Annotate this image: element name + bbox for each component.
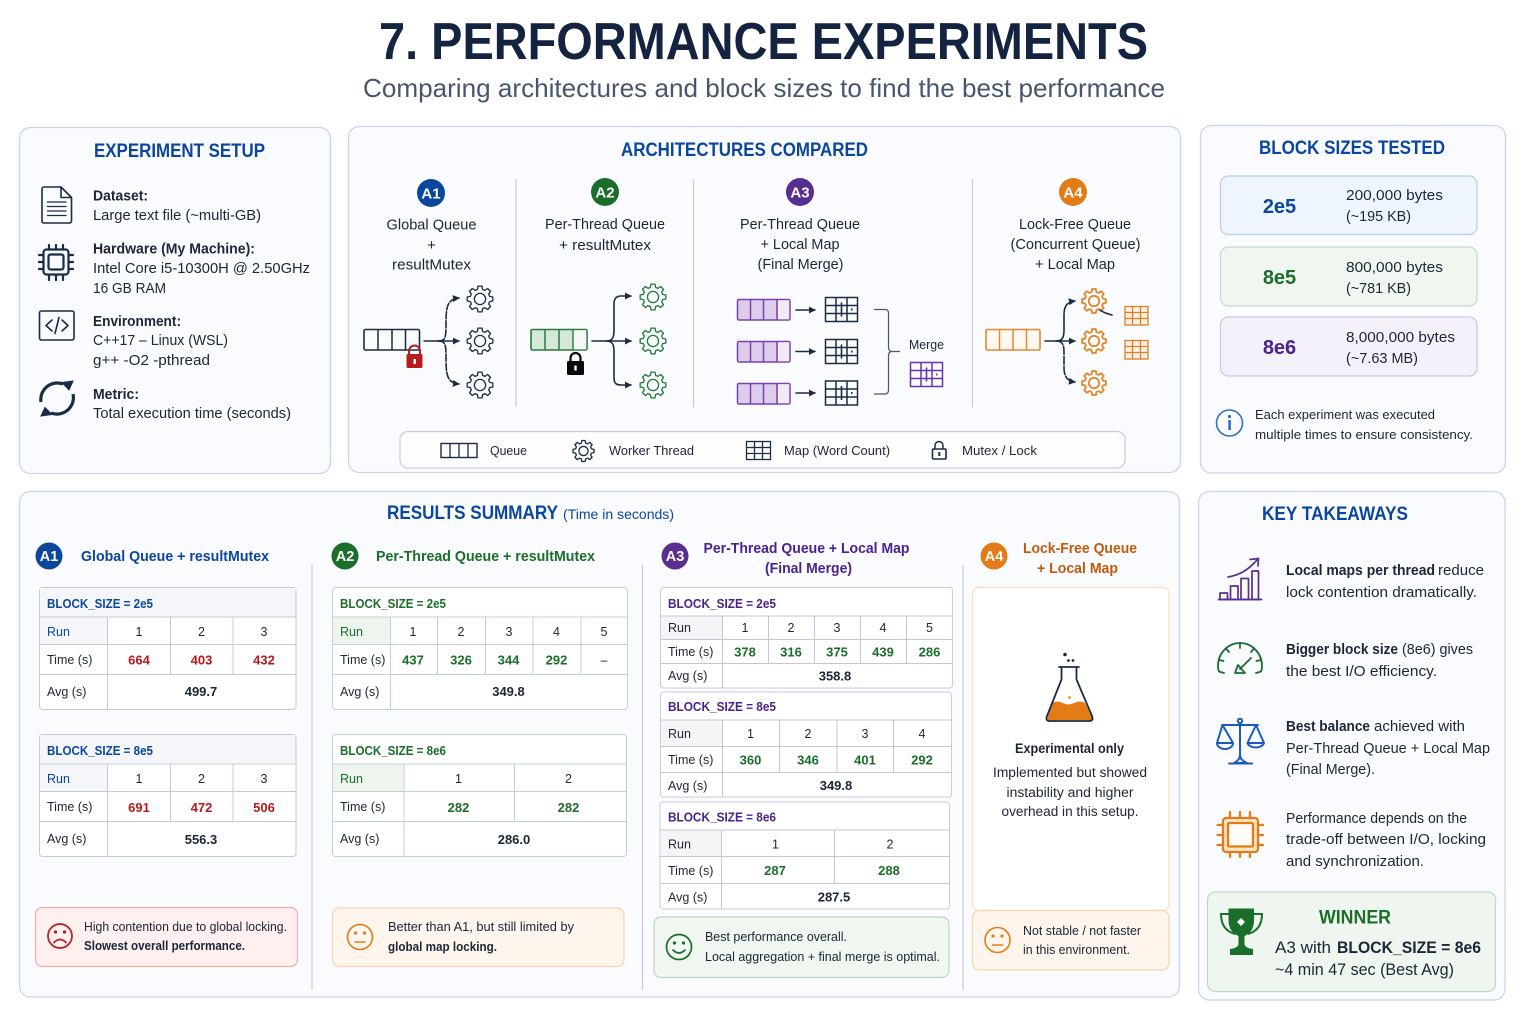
table A2 2e5: 326 xyxy=(450,652,472,668)
table A3 2e5: Avg (s) xyxy=(668,669,707,683)
table A2 2e5: 344 xyxy=(498,652,520,668)
label A3: (Final Merge) xyxy=(758,256,844,273)
takeaway 3: Per-Thread Queue + Local Map xyxy=(1286,740,1490,757)
column A1 xyxy=(36,542,298,966)
legend: map: Map (Word Count) xyxy=(784,443,890,458)
text: hardware: Intel Core i5-10300H @ 2.50GHz xyxy=(93,260,310,277)
callout A1: High contention due to global locking. xyxy=(84,920,287,934)
icon: flask xyxy=(1046,653,1093,721)
legend: queue xyxy=(441,443,527,458)
table A3 8e5: Avg (s) xyxy=(668,779,707,793)
takeaway 3: Best balance xyxy=(1286,718,1370,735)
table A3 2e5: Run xyxy=(668,621,691,635)
legend: mutex xyxy=(932,442,1038,459)
table A1 2e5: BLOCK_SIZE = 2e5 xyxy=(47,597,153,611)
takeaway 2: the best I/O efficiency. xyxy=(1286,663,1437,680)
experimental card: instability and higher xyxy=(1006,785,1134,800)
table A3 2e5: Time (s) xyxy=(668,645,713,659)
experimental card xyxy=(972,588,1169,910)
table A2 8e6: Run xyxy=(340,772,363,786)
architecture A2 xyxy=(531,178,666,398)
legend: map xyxy=(746,442,890,460)
block size 8e6 xyxy=(1220,317,1477,376)
panel: key takeaways xyxy=(1198,492,1505,1000)
table A2 2e5: Time (s) xyxy=(340,653,385,667)
label A4: (Concurrent Queue) xyxy=(1010,236,1140,253)
takeaway 4: trade-off between I/O, locking xyxy=(1286,831,1486,848)
table A1 2e5: 1 xyxy=(136,625,143,639)
block size 8e6: (~7.63 MB) xyxy=(1346,351,1418,367)
table A3 8e6: 287.5 xyxy=(818,890,850,904)
column A4 xyxy=(972,540,1169,970)
text: environment: Environment: xyxy=(93,313,181,330)
architecture A3 xyxy=(738,178,944,405)
label A4: + Local Map xyxy=(1035,256,1115,273)
table A1 2e5 xyxy=(40,588,296,710)
header A2: Per-Thread Queue + resultMutex xyxy=(376,548,596,565)
table A3 8e5: 349.8 xyxy=(820,778,852,793)
callout A1: Slowest overall performance. xyxy=(84,939,245,953)
table A3 2e5: 4 xyxy=(880,621,887,635)
table A2 8e6: BLOCK_SIZE = 8e6 xyxy=(340,744,446,758)
takeaway 3: (Final Merge). xyxy=(1286,761,1375,778)
table A2 2e5: BLOCK_SIZE = 2e5 xyxy=(340,597,446,611)
header A4 xyxy=(980,540,1137,577)
block size 8e6: 8e6 xyxy=(1263,337,1296,359)
table A3 2e5: 286 xyxy=(919,644,940,660)
table A1 8e5: BLOCK_SIZE = 8e5 xyxy=(47,744,153,758)
badge A3 xyxy=(786,178,814,206)
table A3 8e6: 287 xyxy=(764,863,786,878)
icon: sad face xyxy=(48,924,72,948)
table A3 8e6: BLOCK_SIZE = 8e6 xyxy=(668,810,776,824)
takeaway 1: lock contention dramatically. xyxy=(1286,584,1477,601)
icon: trophy xyxy=(1221,908,1262,955)
table A3 2e5: 439 xyxy=(872,644,894,660)
text: hardware: Hardware (My Machine): xyxy=(93,240,255,258)
table A1 8e5: 2 xyxy=(198,772,205,786)
table A3 2e5: 375 xyxy=(826,644,848,660)
table A3 8e6: 288 xyxy=(878,863,900,878)
header A3 xyxy=(662,540,910,577)
table A3 2e5: 1 xyxy=(742,621,749,635)
legend: queue: Queue xyxy=(490,443,527,458)
label A1: resultMutex xyxy=(392,256,472,274)
header A4: A4 xyxy=(985,549,1003,565)
table A1 2e5: 664 xyxy=(128,652,151,668)
table A2 8e6: Avg (s) xyxy=(340,832,379,846)
badge A4: A4 xyxy=(1063,184,1083,202)
table A3 2e5: 316 xyxy=(780,644,802,660)
panel: architectures compared xyxy=(348,126,1180,472)
text: metric: Metric: xyxy=(93,386,139,403)
block size 8e5: (~781 KB) xyxy=(1346,281,1411,297)
callout A1 xyxy=(36,908,298,966)
table A3 2e5: 2 xyxy=(788,621,795,635)
table A2 2e5: 437 xyxy=(402,652,424,668)
icon: document xyxy=(42,187,72,223)
takeaway 4: and synchronization. xyxy=(1286,853,1424,870)
table A3 2e5 xyxy=(660,588,952,688)
text: metric: Total execution time (seconds) xyxy=(93,405,291,422)
table A3 8e6: Time (s) xyxy=(668,864,713,878)
heading: results summary: RESULTS SUMMARY xyxy=(387,503,558,524)
icon: neutral face xyxy=(985,928,1010,952)
badge A1: A1 xyxy=(421,186,441,202)
icon: refresh cycle xyxy=(41,381,73,416)
heading: block sizes tested: BLOCK SIZES TESTED xyxy=(1259,138,1445,159)
text: dataset: Dataset: xyxy=(93,188,148,204)
table A1 2e5: 3 xyxy=(261,625,268,639)
takeaway 4 xyxy=(1286,810,1486,870)
experimental card: overhead in this setup. xyxy=(1002,804,1138,819)
winner box: A3 with xyxy=(1275,938,1331,957)
label A2: + resultMutex xyxy=(559,237,651,254)
header A1 xyxy=(36,542,270,570)
table A3 2e5: 3 xyxy=(834,621,841,635)
table A1 8e5 xyxy=(40,734,296,856)
header A4: + Local Map xyxy=(1037,560,1118,577)
takeaway 2: Bigger block size xyxy=(1286,641,1398,658)
table A2 2e5: 1 xyxy=(410,625,417,639)
text: hardware: 16 GB RAM xyxy=(93,280,166,297)
table A2 2e5: 4 xyxy=(553,625,560,639)
text: hardware xyxy=(93,240,310,297)
callout A4: Not stable / not faster xyxy=(1023,924,1141,938)
table A1 8e5: 3 xyxy=(261,772,268,786)
table A2 2e5: 2 xyxy=(458,625,465,639)
header A1: Global Queue + resultMutex xyxy=(81,548,270,565)
table A1 2e5: 2 xyxy=(198,625,205,639)
icon: neutral face xyxy=(348,924,372,950)
icon: orange chip xyxy=(1218,812,1263,857)
takeaway 1: Local maps per thread xyxy=(1286,562,1435,579)
panel: experiment setup xyxy=(20,128,330,474)
table A3 8e5: 346 xyxy=(797,752,819,768)
label A1: Global Queue xyxy=(386,216,476,234)
legend: worker thread xyxy=(573,440,694,462)
table A3 2e5: 5 xyxy=(926,621,933,635)
heading: results summary: (Time in seconds) xyxy=(563,506,674,522)
heading: experiment setup: EXPERIMENT SETUP xyxy=(94,141,265,162)
table A2 8e6: 286.0 xyxy=(498,832,530,847)
table A3 8e5: 1 xyxy=(747,727,754,741)
note: multiple times to ensure consistency. xyxy=(1255,427,1473,442)
header A1: A1 xyxy=(40,549,58,565)
table A1 8e5: Avg (s) xyxy=(47,832,86,846)
winner box: WINNER xyxy=(1319,908,1391,928)
table A3 8e5: 401 xyxy=(854,752,876,768)
text: environment xyxy=(93,313,228,369)
table A1 2e5: Run xyxy=(47,625,70,639)
diagram: global queue with lock xyxy=(364,286,493,398)
table A1 8e5: 691 xyxy=(128,800,150,815)
callout A4 xyxy=(972,910,1169,970)
label A4 xyxy=(1010,216,1140,273)
table A1 2e5: 499.7 xyxy=(185,684,217,699)
badge A3: A3 xyxy=(790,184,810,202)
takeaway 3: achieved with xyxy=(1374,718,1465,735)
badge A4 xyxy=(1059,178,1087,206)
block size 8e5: 8e5 xyxy=(1263,267,1296,289)
table A3 8e5: 4 xyxy=(919,727,926,741)
legend: mutex: Mutex / Lock xyxy=(962,443,1038,458)
note: Each experiment was executed xyxy=(1255,407,1435,422)
architecture A4 xyxy=(986,178,1148,395)
experimental card: Experimental only xyxy=(1015,741,1124,756)
label A3 xyxy=(740,216,860,273)
icon: code window xyxy=(40,311,74,340)
subtitle: Comparing architectures and block sizes to find the best performance xyxy=(363,73,1165,103)
table A1 2e5: 403 xyxy=(191,652,212,668)
table A1 8e5: 1 xyxy=(136,772,143,786)
header A4: Lock-Free Queue xyxy=(1023,540,1137,557)
heading: results summary xyxy=(387,503,674,524)
table A3 8e5: 3 xyxy=(862,727,869,741)
callout A2: Better than A1, but still limited by xyxy=(388,920,575,934)
takeaway 2 xyxy=(1286,641,1473,680)
header A3: Per-Thread Queue + Local Map xyxy=(704,540,910,557)
badge A2 xyxy=(591,178,619,206)
table A2 2e5: 292 xyxy=(546,652,567,668)
callout A3: Local aggregation + final merge is optimal. xyxy=(705,950,940,964)
text: dataset: Large text file (~multi-GB) xyxy=(93,207,261,224)
legend xyxy=(400,432,1125,468)
table A2 2e5: Run xyxy=(340,625,363,639)
header A3: A3 xyxy=(666,549,684,565)
block size 2e5: (~195 KB) xyxy=(1346,209,1411,225)
heading: architectures compared: ARCHITECTURES COMPARED xyxy=(621,140,868,161)
text: dataset xyxy=(93,188,261,224)
table A2 2e5 xyxy=(332,588,628,710)
column A3 xyxy=(654,540,952,978)
callout A4: in this environment. xyxy=(1023,943,1130,957)
takeaway 3 xyxy=(1286,718,1490,778)
panel: block sizes tested xyxy=(1200,126,1506,473)
table A2 8e6: 1 xyxy=(455,772,462,786)
table A2 8e6: 282 xyxy=(558,800,579,815)
table A1 8e5: 506 xyxy=(253,800,275,815)
table A3 8e5: Run xyxy=(668,727,691,741)
table A2 2e5: – xyxy=(601,654,608,668)
diagram: per-thread queue with mutex xyxy=(531,284,666,398)
icon: gauge xyxy=(1218,643,1262,673)
label A3: + Local Map xyxy=(760,236,840,253)
table A3 8e6 xyxy=(660,802,950,909)
block size 2e5: 2e5 xyxy=(1263,196,1296,218)
merge label: Merge xyxy=(909,337,944,352)
table A3 8e6: Avg (s) xyxy=(668,890,707,904)
badge A2: A2 xyxy=(595,184,615,202)
table A3 8e5 xyxy=(660,692,952,797)
panel: results summary xyxy=(20,492,1180,997)
diagram: per-thread queues with local maps and merge xyxy=(738,298,944,405)
table A2 8e6: 2 xyxy=(565,772,572,786)
header A2 xyxy=(332,542,596,570)
table A1 8e5: Time (s) xyxy=(47,800,92,814)
table A3 8e6: Run xyxy=(668,838,691,852)
table A2 8e6: Time (s) xyxy=(340,800,385,814)
badge A1 xyxy=(417,179,445,207)
takeaway 4: Performance depends on the xyxy=(1286,810,1467,827)
block size 8e5: 800,000 bytes xyxy=(1346,260,1443,276)
block size 2e5: 200,000 bytes xyxy=(1346,188,1443,204)
icon: rising bar chart xyxy=(1218,558,1262,600)
callout A2 xyxy=(332,908,624,966)
table A3 2e5: 358.8 xyxy=(819,668,851,684)
note xyxy=(1255,407,1473,442)
label A1: + xyxy=(427,237,436,254)
table A3 8e5: 360 xyxy=(740,752,761,768)
table A1 8e5: 556.3 xyxy=(185,832,217,847)
table A3 8e5: BLOCK_SIZE = 8e5 xyxy=(668,700,776,714)
table A1 2e5: 432 xyxy=(253,652,275,668)
text: environment: g++ -O2 -pthread xyxy=(93,352,210,369)
header A3: (Final Merge) xyxy=(765,560,852,577)
diagram: lock-free queue with local maps xyxy=(986,289,1148,395)
heading: key takeaways: KEY TAKEAWAYS xyxy=(1262,504,1408,525)
takeaway 1: reduce xyxy=(1438,562,1484,579)
table A1 2e5: Avg (s) xyxy=(47,685,86,699)
table A1 2e5: Time (s) xyxy=(47,653,92,667)
table A3 8e6: 1 xyxy=(772,838,779,852)
column A2 xyxy=(332,542,628,966)
text: metric xyxy=(93,386,291,422)
table A2 8e6: 282 xyxy=(448,800,469,815)
takeaway 2: (8e6) gives xyxy=(1402,641,1473,658)
winner box: BLOCK_SIZE = 8e6 xyxy=(1337,938,1481,957)
icon: balance scale xyxy=(1217,719,1264,764)
architecture A1 xyxy=(364,179,493,398)
label A1 xyxy=(386,216,476,274)
callout A2: global map locking. xyxy=(388,940,497,954)
table A3 8e5: 2 xyxy=(805,727,812,741)
label A4: Lock-Free Queue xyxy=(1019,216,1131,233)
table A2 2e5: 3 xyxy=(506,625,513,639)
table A3 2e5: 378 xyxy=(734,644,756,660)
table A1 8e5: Run xyxy=(47,772,70,786)
experimental card: Implemented but showed xyxy=(993,765,1147,780)
text: environment: C++17 – Linux (WSL) xyxy=(93,332,228,349)
table A3 2e5: BLOCK_SIZE = 2e5 xyxy=(668,597,776,611)
table A3 8e5: 292 xyxy=(911,752,933,768)
table A2 2e5: 5 xyxy=(601,625,608,639)
label A2: Per-Thread Queue xyxy=(545,216,665,233)
takeaway 1 xyxy=(1286,562,1484,601)
table A3 8e6: 2 xyxy=(887,838,894,852)
callout A3 xyxy=(654,917,949,978)
table A3 8e5: Time (s) xyxy=(668,753,713,767)
block size 2e5 xyxy=(1220,176,1477,234)
winner box xyxy=(1208,892,1496,992)
table A2 2e5: 349.8 xyxy=(492,684,525,699)
title: 7. PERFORMANCE EXPERIMENTS xyxy=(379,13,1148,71)
icon: smiling face xyxy=(666,934,692,960)
table A2 2e5: Avg (s) xyxy=(340,685,379,699)
icon: cpu chip xyxy=(39,245,73,280)
table A2 8e6 xyxy=(332,734,626,856)
header A2: A2 xyxy=(336,549,354,565)
icon: info xyxy=(1216,410,1242,436)
label A2 xyxy=(545,216,665,254)
table A1 8e5: 472 xyxy=(191,800,212,815)
block size 8e5 xyxy=(1220,247,1477,306)
block size 8e6: 8,000,000 bytes xyxy=(1346,330,1455,346)
winner box: ~4 min 47 sec (Best Avg) xyxy=(1275,960,1454,979)
callout A3: Best performance overall. xyxy=(705,930,847,944)
label A3: Per-Thread Queue xyxy=(740,216,860,233)
legend: worker thread: Worker Thread xyxy=(609,443,694,458)
